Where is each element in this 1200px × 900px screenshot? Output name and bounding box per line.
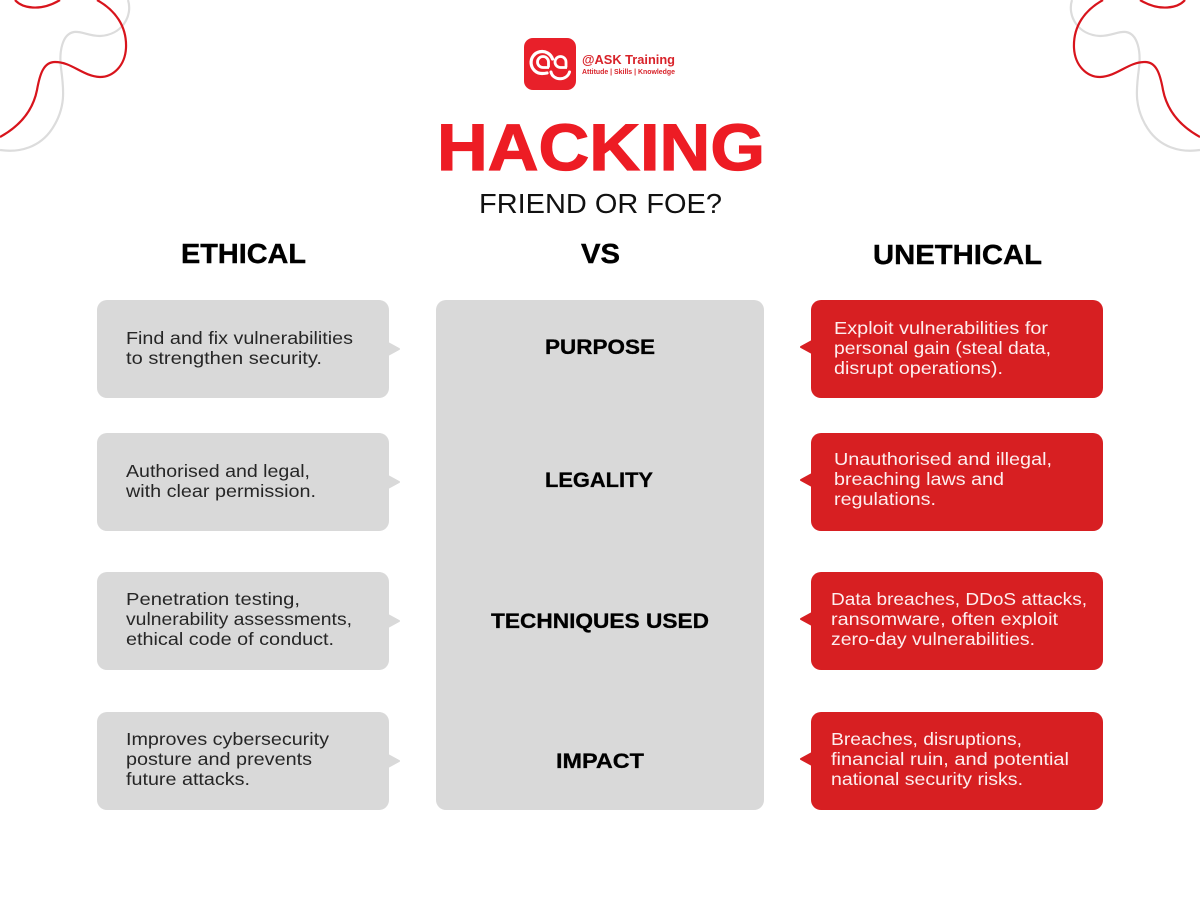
card: unethical techniques (801, 572, 1103, 670)
card: ethical impact: future attacks. (126, 769, 250, 789)
card: ethical techniques: vulnerability assessments, (126, 609, 352, 629)
label: legality: LEGALITY (545, 468, 653, 492)
card: unethical impact: national security risks. (831, 769, 1023, 789)
label: techniques used: TECHNIQUES USED (491, 609, 709, 633)
card: unethical techniques: zero-day vulnerabilities. (831, 629, 1035, 649)
label: impact: IMPACT (556, 749, 644, 773)
panel: criteria column (436, 300, 764, 810)
card: unethical purpose: personal gain (steal data, (834, 338, 1051, 358)
card: unethical impact: financial ruin, and potential (831, 749, 1069, 769)
icon: logo mark (524, 38, 576, 90)
title: HACKING (437, 110, 765, 184)
card: ethical legality: with clear permission. (125, 481, 316, 501)
card: unethical purpose: Exploit vulnerabilities for (834, 318, 1048, 338)
card: ethical legality: Authorised and legal, (126, 461, 310, 481)
logo (524, 38, 675, 90)
logo tagline: Attitude | Skills | Knowledge (582, 67, 675, 76)
heading: unethical: UNETHICAL (873, 239, 1042, 270)
card: unethical techniques: Data breaches, DDoS attacks, (831, 589, 1087, 609)
card: ethical impact: posture and prevents (126, 749, 312, 769)
card: unethical legality: Unauthorised and illegal, (834, 449, 1052, 469)
card: ethical purpose: to strengthen security. (126, 348, 322, 368)
card: unethical purpose (801, 300, 1103, 398)
label: purpose: PURPOSE (545, 335, 655, 359)
decorative curves: top left (0, 0, 129, 151)
card: ethical techniques (97, 572, 399, 670)
decorative curves: top right (1071, 0, 1200, 151)
card: unethical legality: regulations. (834, 489, 936, 509)
heading: ethical: ETHICAL (181, 238, 306, 269)
card: ethical techniques: Penetration testing, (126, 589, 300, 609)
subtitle: FRIEND OR FOE? (479, 188, 722, 219)
card: ethical impact: Improves cybersecurity (126, 729, 329, 749)
card: ethical purpose: Find and fix vulnerabilities (126, 328, 353, 348)
card: ethical impact (97, 712, 399, 810)
card: unethical impact: Breaches, disruptions, (831, 729, 1022, 749)
card: unethical purpose: disrupt operations). (834, 358, 1003, 378)
card: unethical legality (801, 433, 1103, 531)
heading: vs: VS (581, 238, 620, 269)
card: unethical impact (801, 712, 1103, 810)
card: ethical purpose (97, 300, 399, 398)
card: ethical legality (97, 433, 399, 531)
card: unethical legality: breaching laws and (834, 469, 1004, 489)
card: ethical techniques: ethical code of conduct. (126, 629, 334, 649)
card: unethical techniques: ransomware, often exploit (831, 609, 1058, 629)
logo name: @ASK Training (582, 52, 675, 67)
